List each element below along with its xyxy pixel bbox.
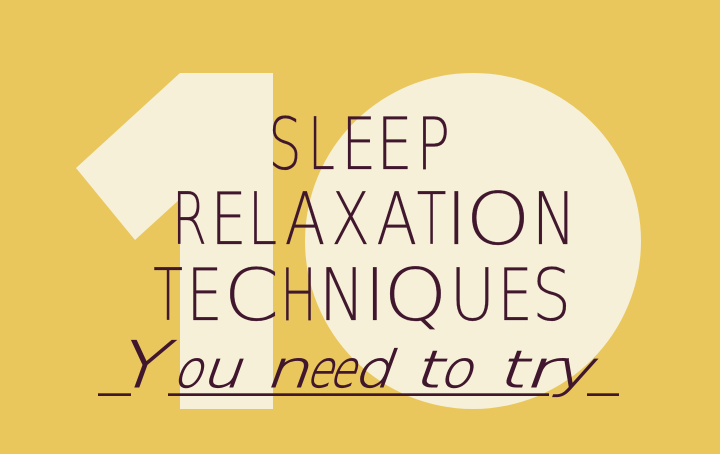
underline left bbox=[98, 393, 131, 396]
underline main bbox=[168, 393, 549, 396]
title line: SLEEP: E bbox=[376, 102, 413, 186]
title line: RELAXATION: A bbox=[376, 177, 417, 261]
big numeral 10 bbox=[76, 73, 641, 409]
title line: RELAXATION: R bbox=[172, 177, 207, 261]
title line: TECHNIQUES: S bbox=[532, 253, 571, 337]
title line: RELAXATION: T bbox=[417, 177, 446, 261]
title line: RELAXATION: O bbox=[465, 177, 531, 261]
subtitle script: t bbox=[491, 341, 542, 400]
title line: TECHNIQUES: N bbox=[319, 253, 365, 337]
subtitle script: e bbox=[300, 341, 348, 400]
title line: TECHNIQUES: U bbox=[450, 253, 495, 337]
title line: TECHNIQUES: Q bbox=[383, 253, 448, 337]
title line: TECHNIQUES: H bbox=[280, 253, 317, 337]
title line: TECHNIQUES: E bbox=[186, 253, 223, 337]
subtitle script: r bbox=[517, 341, 575, 400]
subtitle script: n bbox=[259, 341, 325, 400]
subtitle script: y bbox=[546, 341, 608, 400]
title line: RELAXATION: E bbox=[210, 177, 247, 261]
title bbox=[153, 102, 576, 337]
subtitle underline bbox=[98, 393, 619, 396]
title line: TECHNIQUES: E bbox=[498, 253, 533, 337]
title line: TECHNIQUES: I bbox=[364, 253, 385, 337]
subtitle script: t bbox=[407, 341, 457, 400]
title line: RELAXATION: L bbox=[248, 177, 277, 261]
title line: SLEEP: P bbox=[416, 102, 450, 186]
subtitle script: o bbox=[433, 341, 488, 400]
subtitle script: Y bbox=[107, 328, 183, 402]
title line: TECHNIQUES: C bbox=[224, 253, 279, 337]
title line: SLEEP: S bbox=[268, 102, 302, 186]
numeral 1 bbox=[76, 73, 273, 409]
subtitle script: d bbox=[347, 341, 407, 400]
subtitle script: u bbox=[195, 341, 257, 400]
title line: SLEEP: E bbox=[341, 102, 376, 186]
subtitle script: e bbox=[323, 341, 371, 400]
underline right bbox=[587, 393, 619, 396]
title line: SLEEP: L bbox=[308, 102, 335, 186]
numeral 0 bbox=[305, 73, 641, 409]
subtitle script: o bbox=[167, 341, 218, 400]
title line: RELAXATION: I bbox=[446, 177, 467, 261]
title line: RELAXATION: A bbox=[284, 177, 326, 261]
title line: TECHNIQUES: T bbox=[153, 253, 183, 337]
title line: RELAXATION: X bbox=[331, 177, 370, 261]
title line: RELAXATION: N bbox=[532, 177, 576, 261]
